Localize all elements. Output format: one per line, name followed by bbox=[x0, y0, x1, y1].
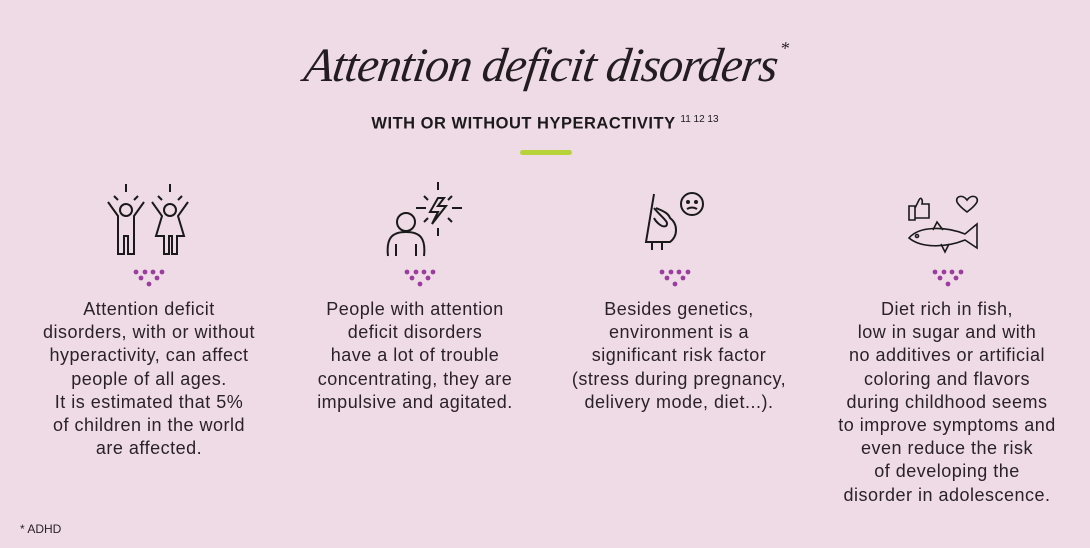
text: column 4: no additives or artificial bbox=[849, 345, 1045, 365]
dots marker 2 bbox=[404, 270, 436, 286]
text: column 4 bbox=[838, 299, 1056, 505]
text: column 1: disorders, with or without bbox=[43, 322, 255, 342]
text: column 2: concentrating, they are bbox=[318, 369, 512, 389]
text: column 4: of developing the bbox=[874, 461, 1020, 481]
text: column 4: coloring and flavors bbox=[864, 369, 1030, 389]
text: column 2: impulsive and agitated. bbox=[317, 392, 513, 412]
icon: two children bbox=[107, 184, 189, 255]
text: column 3: Besides genetics, bbox=[604, 299, 754, 319]
text: column 3 bbox=[572, 299, 786, 412]
text: column 3: environment is a bbox=[609, 322, 749, 342]
text: column 4: even reduce the risk bbox=[861, 438, 1033, 458]
text: column 4: Diet rich in fish, bbox=[881, 299, 1013, 319]
icon: pregnant woman stressed bbox=[644, 192, 704, 250]
text: column 2: deficit disorders bbox=[348, 322, 482, 342]
text: column 3: delivery mode, diet...). bbox=[584, 392, 774, 412]
icon: person with lightning bbox=[386, 182, 462, 256]
dots marker 4 bbox=[932, 270, 964, 286]
text: column 2 bbox=[317, 299, 513, 412]
subtitle: WITH OR WITHOUT HYPERACTIVITY 11 12 13 bbox=[371, 114, 719, 132]
footnote: * ADHD bbox=[20, 522, 61, 536]
text: column 4: disorder in adolescence. bbox=[843, 485, 1051, 505]
text: column 2: People with attention bbox=[326, 299, 504, 319]
text: column 1: Attention deficit bbox=[83, 299, 215, 319]
text: column 1 bbox=[43, 299, 255, 458]
text: column 1: people of all ages. bbox=[71, 369, 227, 389]
text: column 1: It is estimated that 5% bbox=[55, 392, 243, 412]
text: column 4: low in sugar and with bbox=[858, 322, 1036, 342]
green underline accent bbox=[520, 150, 572, 155]
text: column 1: of children in the world bbox=[53, 415, 245, 435]
text: column 4: during childhood seems bbox=[846, 392, 1048, 412]
text: column 2: have a lot of trouble bbox=[331, 345, 499, 365]
title: Attention deficit disorders* bbox=[301, 38, 789, 92]
text: column 1: hyperactivity, can affect bbox=[50, 345, 248, 365]
dots markers bbox=[134, 270, 164, 286]
text: column 3: (stress during pregnancy, bbox=[572, 369, 786, 389]
icon: fish with thumbs up and heart bbox=[908, 196, 978, 254]
dots marker 3 bbox=[660, 270, 690, 286]
text: column 3: significant risk factor bbox=[592, 345, 766, 365]
text: column 4: to improve symptoms and bbox=[838, 415, 1056, 435]
text: column 1: are affected. bbox=[96, 438, 202, 458]
